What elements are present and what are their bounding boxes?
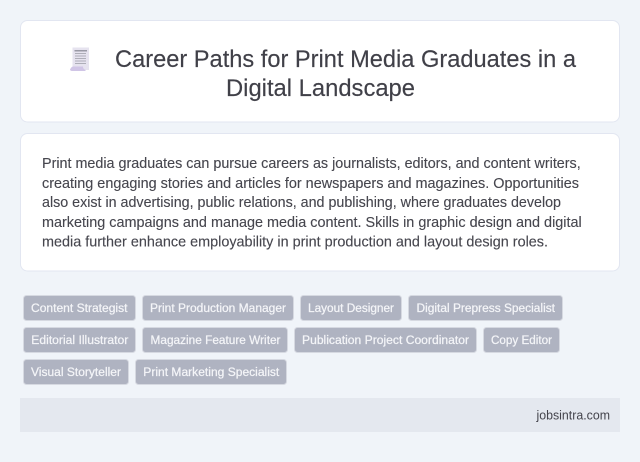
tag: Publication Project Coordinator: Publication Project Coordinator (302, 333, 469, 347)
tag: Editorial Illustrator: Editorial Illustrator (31, 333, 128, 347)
tag: Layout Designer: Layout Designer (308, 301, 394, 315)
tag: Visual Storyteller: Visual Storyteller (31, 365, 121, 379)
text block: summary (42, 156, 582, 250)
panel: header (20, 20, 620, 122)
text block: summary: also exist in advertising, public relations, and publishing, where graduates develop (42, 195, 561, 211)
tag: Print Production Manager: Print Production Manager (150, 301, 286, 315)
text block: summary: creating engaging stories and articles for newspapers and magazines. Opportunities (42, 176, 579, 192)
tag: Content Strategist: Content Strategist (31, 301, 128, 315)
tag: Digital Prepress Specialist (408, 296, 562, 320)
tag: Print Marketing Specialist: Print Marketing Specialist (143, 365, 280, 379)
tag: Magazine Feature Writer (142, 328, 288, 352)
tag: Editorial Illustrator (24, 328, 136, 352)
footer bar (20, 398, 620, 432)
text block: summary: Print media graduates can pursue careers as journalists, editors, and content writers, (42, 156, 581, 172)
tag: Print Marketing Specialist (136, 360, 286, 384)
title: Career Paths for Print Media Graduates in a (115, 46, 577, 73)
tag: Visual Storyteller (24, 360, 128, 384)
tag: Print Production Manager (142, 296, 294, 320)
tag: Content Strategist (24, 296, 136, 320)
tag: Layout Designer (300, 296, 402, 320)
tag list: career roles (24, 296, 562, 384)
tag: Magazine Feature Writer: Magazine Feature Writer (150, 333, 280, 347)
tag: Digital Prepress Specialist: Digital Prepress Specialist (416, 301, 556, 315)
text block: summary: media further enhance employability in print production and layout design roles. (42, 234, 548, 250)
title: Digital Landscape (226, 75, 415, 102)
tag: Copy Editor (484, 328, 560, 352)
text block: summary: marketing campaigns and manage media content. Skills in graphic design and digital (42, 215, 582, 231)
tag: Copy Editor: Copy Editor (491, 333, 552, 347)
tag: Publication Project Coordinator (294, 328, 476, 352)
footer source text: jobsintra.com (536, 408, 610, 422)
panel: summary text (20, 134, 620, 271)
title (115, 46, 577, 102)
icon: printed document (70, 48, 89, 71)
